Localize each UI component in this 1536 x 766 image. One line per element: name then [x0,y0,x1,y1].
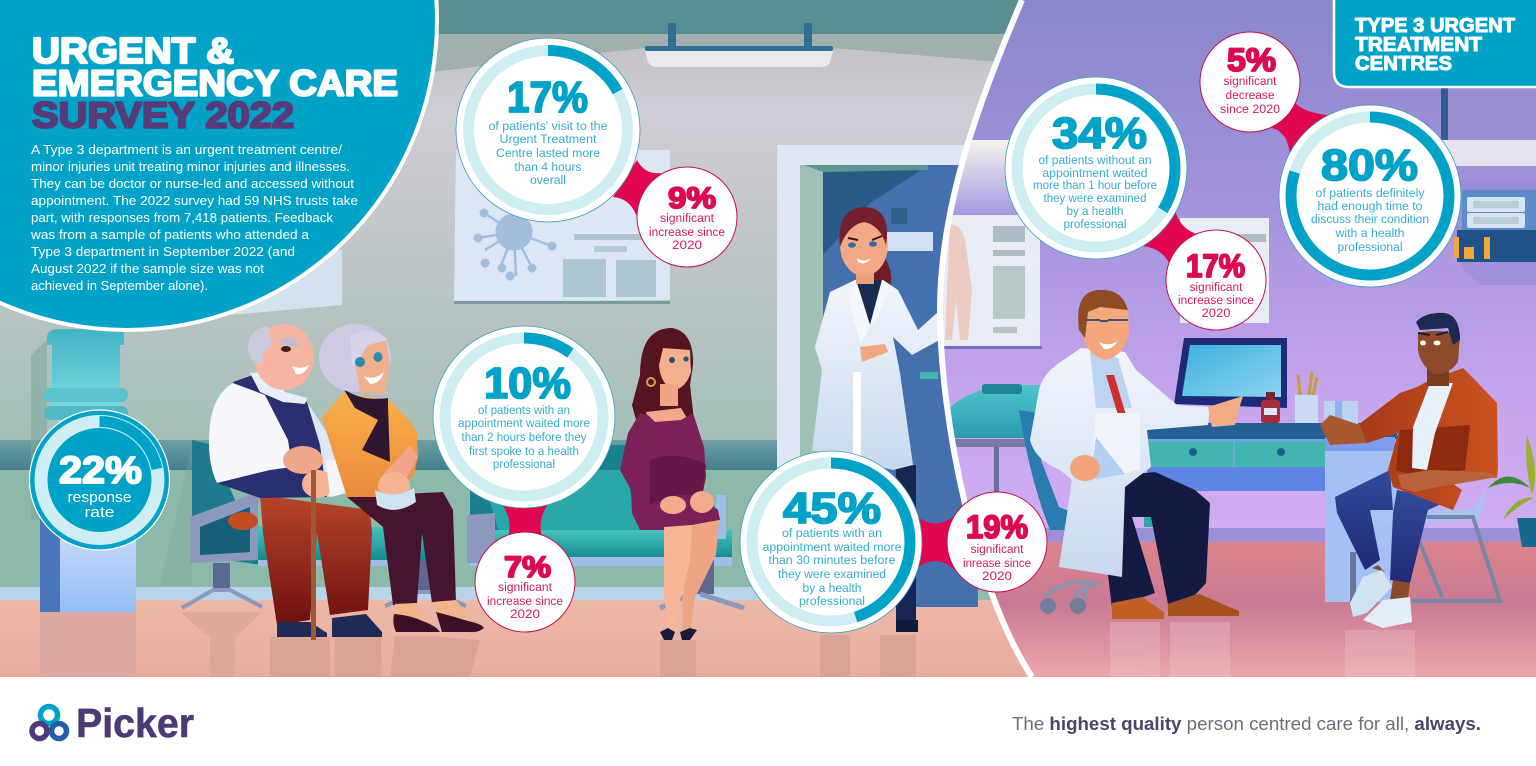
icon: potted plant [1488,435,1536,547]
stat circle: 10% waited over 2 hours: 10% [484,359,571,408]
connector: 5% to 80% [1272,100,1328,155]
footer [0,677,1536,766]
wall posters [940,215,1269,349]
stat circle: 80% enough time: professional [1338,240,1402,254]
stat circle: 17% visit over 4 hours: overall [530,173,566,187]
change bubble: 19%: significant [970,542,1024,556]
logo: Picker: Picker [76,700,194,746]
stat circle: 22% response rate: 22% [59,450,142,492]
panel: type 3 label: TYPE 3 URGENT [1355,15,1515,37]
stat circle: 45% waited over 30 minutes: they were examined [778,567,886,581]
title [32,30,398,136]
stat circle: 45% waited over 30 minutes: professional [799,594,865,608]
connector: 45% to 19% [915,515,955,570]
stat circle: 34% waited over 1 hour: appointment waited [1042,166,1148,180]
icon: ceiling light [645,23,833,67]
stat circle: 10% waited over 2 hours [433,326,615,508]
connector: 10% to 7% [497,498,553,545]
icon: desk [1147,423,1397,602]
panel: type 3 label: TREATMENT [1355,34,1482,56]
floor reflections right [1110,622,1415,677]
intro text block: August 2022 if the sample size was not [31,261,264,276]
header panel [0,0,437,330]
floor reflections [270,635,916,677]
panel: waiting room scene [0,0,1060,677]
stat circle: 17% visit over 4 hours: 17% [507,73,588,122]
change bubble: 5%: significant [1224,74,1277,88]
change bubble: 9%: increase since [649,225,725,239]
stat circle: 22% response rate: response [68,489,132,506]
change bubble: 5%: since 2020 [1220,102,1280,116]
stat circle: 45% waited over 30 minutes: appointment waited more [762,540,902,554]
change bubble: 7%: increase since [487,594,563,608]
window and strip [1440,87,1536,166]
stat circle: 17% visit over 4 hours [456,38,640,222]
icon: patient [1320,313,1498,628]
intro text block: appointment. The 2022 survey had 59 NHS trusts take [31,193,358,208]
connector: 34% to 17% [1142,210,1200,270]
change bubble: 9%: significant [660,211,715,225]
stat circle: 10% waited over 2 hours: appointment waited more [458,416,590,430]
change bubble: 17% [1166,230,1266,330]
change bubble: 7%: 2020 [510,607,540,621]
stat circle: 34% waited over 1 hour: professional [1064,217,1126,231]
stat circle: 45% waited over 30 minutes: by a health [802,581,862,595]
title: EMERGENCY CARE [32,62,398,104]
change bubble: 19% [947,492,1047,592]
change bubble: 19%: 19% [966,509,1028,545]
change bubble: 17%: 2020 [1202,306,1231,320]
stat circle: 80% enough time: 80% [1321,141,1418,190]
decorative wall shade [160,445,192,585]
connector: 17% to 9% [613,160,661,217]
stat circle: 80% enough time: of patients definitely [1316,186,1425,200]
icon: seated woman [620,328,720,640]
intro text block: Type 3 department in September 2022 (and [31,244,295,259]
change bubble: 17%: increase since [1178,293,1254,307]
stat circle: 10% waited over 2 hours: of patients with an [478,403,570,417]
stat circle: 45% waited over 30 minutes [740,451,922,633]
change bubble: 17%: 17% [1186,248,1245,284]
stat circle: 45% waited over 30 minutes: 45% [783,484,881,533]
stat circle: 80% enough time [1279,105,1461,287]
stat circle: 34% waited over 1 hour: of patients without an [1038,153,1152,167]
stat circle: 34% waited over 1 hour: they were examined [1044,191,1147,205]
panel: type 3 label: CENTRES [1355,53,1452,75]
panel: type 3 label [1334,0,1536,87]
intro text block: part, with responses from 7,418 patients. Feedback [31,210,333,225]
icon: computer monitor [1174,338,1287,408]
stat circle: 22% response rate [30,410,170,550]
panel: consulting room scene [930,0,1536,677]
icon: left chair [180,440,466,677]
change bubble: 7%: significant [498,580,553,594]
stat circle: 45% waited over 30 minutes: of patients with an [782,526,882,540]
change bubble: 17%: significant [1190,280,1243,294]
change bubble: 7%: 7% [504,551,551,584]
intro text block: minor injuries unit treating minor injuries and illnesses. [31,159,350,174]
icon: elderly woman [319,324,484,632]
intro text block [30,142,358,293]
icon: elderly man [209,324,382,640]
stat circle: 17% visit over 4 hours: than 4 hours [514,160,582,174]
change bubble: 5%: 5% [1227,42,1276,78]
stat circle: 17% visit over 4 hours: Urgent Treatment [500,132,597,146]
change bubble: 7% [475,532,575,632]
intro text block: achieved in September alone). [31,278,208,293]
stat circle: 80% enough time: had enough time to [1318,199,1423,213]
stat circle: 34% waited over 1 hour [1005,77,1187,259]
stat circle: 34% waited over 1 hour: more than 1 hour before [1033,178,1157,192]
icon: wall shelf [1454,190,1536,285]
intro text block: A Type 3 department is an urgent treatment centre/ [31,142,342,157]
stat circle: 10% waited over 2 hours: professional [493,457,555,471]
intro text block: was from a sample of patients who attended a [30,227,310,242]
icon: water cooler [31,329,136,677]
change bubble: 5%: decrease [1226,88,1275,102]
change bubble: 9%: 2020 [672,238,702,252]
stat circle: 17% visit over 4 hours: Centre lasted more [496,146,600,160]
change bubble: 19%: 2020 [982,569,1012,583]
tagline: The highest quality person centred care for all, always. [1012,713,1481,734]
divider curve [940,0,1032,677]
stat circle: 10% waited over 2 hours: first spoke to a health [469,444,579,458]
stat circle: 10% waited over 2 hours: than 2 hours before they [462,430,587,444]
icon: exam table [950,384,1040,492]
stat circle: 80% enough time: with a health [1335,226,1405,240]
icon: doctor [1019,290,1243,619]
change bubble: 9%: 9% [668,182,716,215]
change bubble: 5% [1200,32,1300,132]
intro text block: They can be doctor or nurse-led and accessed without [31,176,354,191]
stat circle: 17% visit over 4 hours: of patients' visit to the [488,119,608,133]
stat circle: 80% enough time: discuss their condition [1311,212,1429,226]
icon: door and frame [777,145,978,607]
wall poster with virus [454,150,670,304]
change bubble: 9% [637,167,737,267]
title: URGENT & [32,30,234,71]
stat circle: 22% response rate: rate [84,504,114,521]
icon: desk items [1261,372,1358,425]
icon: nurse [812,207,945,632]
stat circle: 34% waited over 1 hour: by a health [1066,204,1124,218]
title: SURVEY 2022 [32,94,294,136]
stat circle: 34% waited over 1 hour: 34% [1052,109,1147,158]
icon: right bench [467,445,744,608]
icon: patient chair [1350,487,1500,602]
wall poster behind header [230,250,342,315]
change bubble: 19%: inrease since [963,556,1031,570]
stat circle: 45% waited over 30 minutes: than 30 minutes before [768,553,896,567]
